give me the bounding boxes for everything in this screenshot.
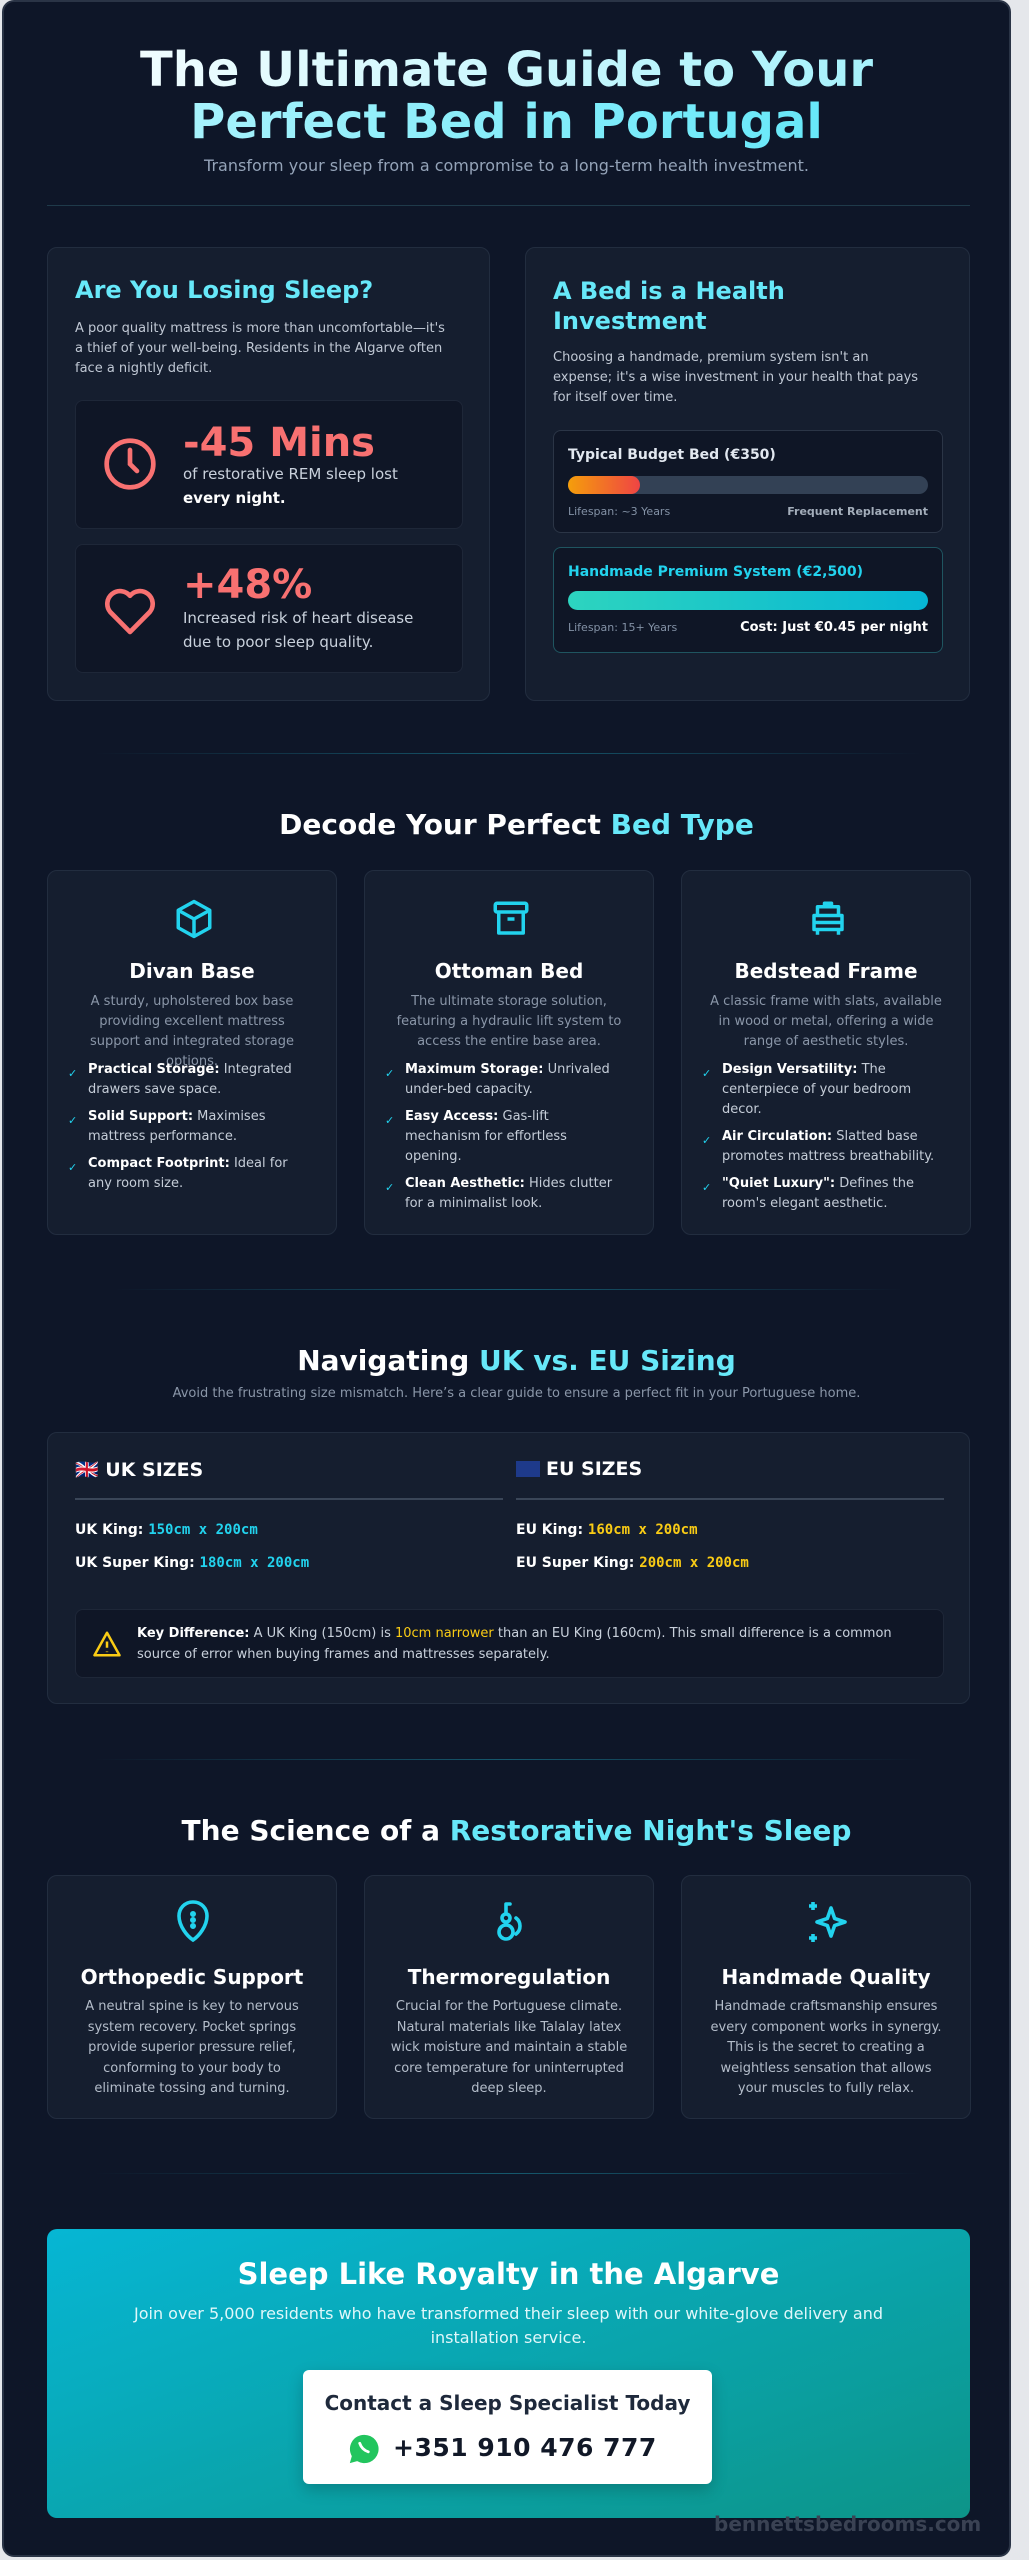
icon: heart — [104, 588, 155, 634]
card: divan: Practical Storage: Integrated drawers save space. — [88, 1062, 292, 1097]
card: ottoman: ✓ — [385, 1114, 394, 1127]
icon: clock — [104, 438, 156, 490]
callout: key difference: Key Difference: A UK King (150cm) is 10cm narrower than an EU King (160cm). This small difference is a common source of error when buying frames and mattresses separately. — [137, 1626, 892, 1662]
icon: warning — [93, 1632, 121, 1656]
icon: bed frame — [812, 902, 844, 935]
bar: budget bed: Typical Budget Bed (€350) — [568, 447, 776, 463]
text: losing sleep intro: A poor quality mattress is more than uncomfortable—it's a thief of your well-being. Residents in the Algarve often face a nightly deficit. — [75, 321, 445, 376]
card: divan: A sturdy, upholstered box base providing excellent mattress support and integrated storage options. — [90, 994, 294, 1069]
stat: -45 mins: of restorative REM sleep lost — [183, 465, 398, 483]
card: ottoman: The ultimate storage solution, featuring a hydraulic lift system to access the entire base area. — [397, 994, 621, 1049]
card: divan: Compact Footprint: Ideal for any room size. — [88, 1156, 288, 1191]
panel: losing sleep — [47, 247, 490, 701]
stat: +48%: +48% — [183, 562, 312, 608]
title: The Ultimate Guide to Your — [140, 42, 873, 98]
title — [140, 42, 873, 150]
title: Perfect Bed in Portugal — [190, 94, 823, 150]
card: handmade — [681, 1875, 971, 2119]
heading: health investment: Investment — [553, 307, 707, 335]
column: EU sizes: EU SIZES — [546, 1458, 642, 1480]
stat: +48%: Increased risk of heart disease — [183, 609, 413, 627]
stat: -45 mins: -45 Mins — [183, 420, 375, 466]
CTA button: Contact a Sleep Specialist Today — [325, 2391, 690, 2415]
heading: health investment — [553, 277, 785, 335]
card: divan: ✓ — [68, 1161, 77, 1174]
card: orthopedic: A neutral spine is key to nervous system recovery. Pocket springs provide superior pressure relief, conforming to your body to eliminate tossing and turning. — [85, 1999, 299, 2096]
icon: spine — [177, 1900, 209, 1942]
card: orthopedic: Orthopedic Support — [81, 1965, 303, 1989]
card: bedstead — [681, 870, 971, 1235]
bar: premium system: Cost: Just €0.45 per night — [740, 620, 928, 635]
card: ottoman: Maximum Storage: Unrivaled under-bed capacity. — [405, 1062, 610, 1097]
card: bedstead: "Quiet Luxury": Defines the room's elegant aesthetic. — [722, 1176, 914, 1211]
column: UK sizes: 🇬🇧 UK SIZES — [75, 1459, 203, 1481]
icon: whatsapp — [350, 2434, 379, 2464]
card: bedstead: Air Circulation: Slatted base promotes mattress breathability. — [722, 1129, 934, 1164]
card: bedstead: A classic frame with slats, available in wood or metal, offering a wide range of aesthetic styles. — [710, 994, 942, 1049]
card: divan: ✓ — [68, 1114, 77, 1127]
CTA button — [303, 2370, 712, 2484]
card: divan: Divan Base — [129, 959, 255, 983]
card: bedstead: ✓ — [702, 1181, 711, 1194]
card: bedstead: Bedstead Frame — [734, 959, 918, 983]
card: ottoman: Clean Aesthetic: Hides clutter for a minimalist look. — [405, 1176, 612, 1211]
card: bedstead: ✓ — [702, 1134, 711, 1147]
bar: premium system — [553, 547, 943, 653]
icon: sparkles — [809, 1902, 847, 1942]
bar: budget bed: Frequent Replacement — [787, 505, 928, 518]
heading: losing sleep: Are You Losing Sleep? — [75, 276, 373, 304]
card: ottoman: Ottoman Bed — [435, 959, 583, 983]
column: UK sizes: UK Super King: 180cm x 200cm — [75, 1555, 309, 1571]
icon: thermo — [497, 1902, 522, 1941]
card: divan: ✓ — [68, 1067, 77, 1080]
heading: bed type: Decode Your Perfect Bed Type — [279, 808, 754, 841]
stat: +48%: due to poor sleep quality. — [183, 633, 373, 651]
CTA button: +351 910 476 777 — [393, 2433, 657, 2462]
panel: health investment — [525, 247, 970, 701]
stat: -45 mins — [75, 400, 463, 529]
icon: archive box — [494, 902, 528, 935]
column: EU sizes — [516, 1458, 944, 1571]
card: thermoregulation: Crucial for the Portuguese climate. Natural materials like Talalay latex wick moisture and maintain a stable core temperature for uninterrupted deep sleep. — [391, 1999, 627, 2096]
CTA heading: Sleep Like Royalty in the Algarve — [238, 2257, 779, 2291]
card: bedstead: Design Versatility: The centerpiece of your bedroom decor. — [722, 1062, 911, 1117]
card: ottoman: ✓ — [385, 1181, 394, 1194]
card: bedstead: ✓ — [702, 1067, 711, 1080]
card: orthopedic — [47, 1875, 337, 2119]
column: EU sizes: EU Super King: 200cm x 200cm — [516, 1555, 749, 1571]
card: divan — [47, 870, 337, 1235]
heading: sizing: Navigating UK vs. EU Sizing — [297, 1344, 736, 1377]
bar: budget bed: Lifespan: ~3 Years — [568, 505, 670, 518]
card: ottoman — [364, 870, 654, 1235]
panel: sizing — [47, 1432, 970, 1704]
text: investment intro: Choosing a handmade, premium system isn't an expense; it's a wise investment in your health that pays for itself over time. — [553, 350, 918, 405]
column: UK sizes: UK King: 150cm x 200cm — [75, 1522, 258, 1538]
subtitle: Transform your sleep from a compromise to a long-term health investment. — [204, 156, 809, 175]
card: thermoregulation: Thermoregulation — [408, 1965, 610, 1989]
card: divan: Solid Support: Maximises mattress performance. — [88, 1109, 265, 1144]
CTA panel — [47, 2229, 970, 2518]
card: handmade: Handmade craftsmanship ensures every component works in synergy. This is the secret to creating a weightless sensation that allows your muscles to fully relax. — [711, 1999, 941, 2096]
stat: -45 mins: every night. — [183, 489, 286, 507]
text: sizing intro: Avoid the frustrating size mismatch. Here’s a clear guide to ensure a perfect fit in your Portuguese home. — [173, 1386, 860, 1401]
CTA text: Join over 5,000 residents who have transformed their sleep with our white-glove delivery and installation service. — [134, 2304, 883, 2347]
heading: health investment: A Bed is a Health — [553, 277, 785, 305]
card: handmade: Handmade Quality — [721, 1965, 930, 1989]
stat: +48% — [75, 544, 463, 673]
heading: science: The Science of a Restorative Night's Sleep — [182, 1814, 851, 1847]
column: EU sizes: EU King: 160cm x 200cm — [516, 1522, 698, 1538]
icon: cube — [176, 900, 212, 938]
column: UK sizes — [75, 1459, 503, 1571]
bar: premium system: Handmade Premium System (€2,500) — [568, 564, 863, 580]
card: thermoregulation — [364, 1875, 654, 2119]
bar: budget bed — [553, 430, 943, 533]
watermark: bennettsbedrooms.com — [714, 2512, 981, 2536]
bar: premium system: Lifespan: 15+ Years — [568, 621, 677, 634]
card: ottoman: Easy Access: Gas-lift mechanism for effortless opening. — [405, 1109, 567, 1164]
card: ottoman: ✓ — [385, 1067, 394, 1080]
callout: key difference — [75, 1609, 944, 1678]
